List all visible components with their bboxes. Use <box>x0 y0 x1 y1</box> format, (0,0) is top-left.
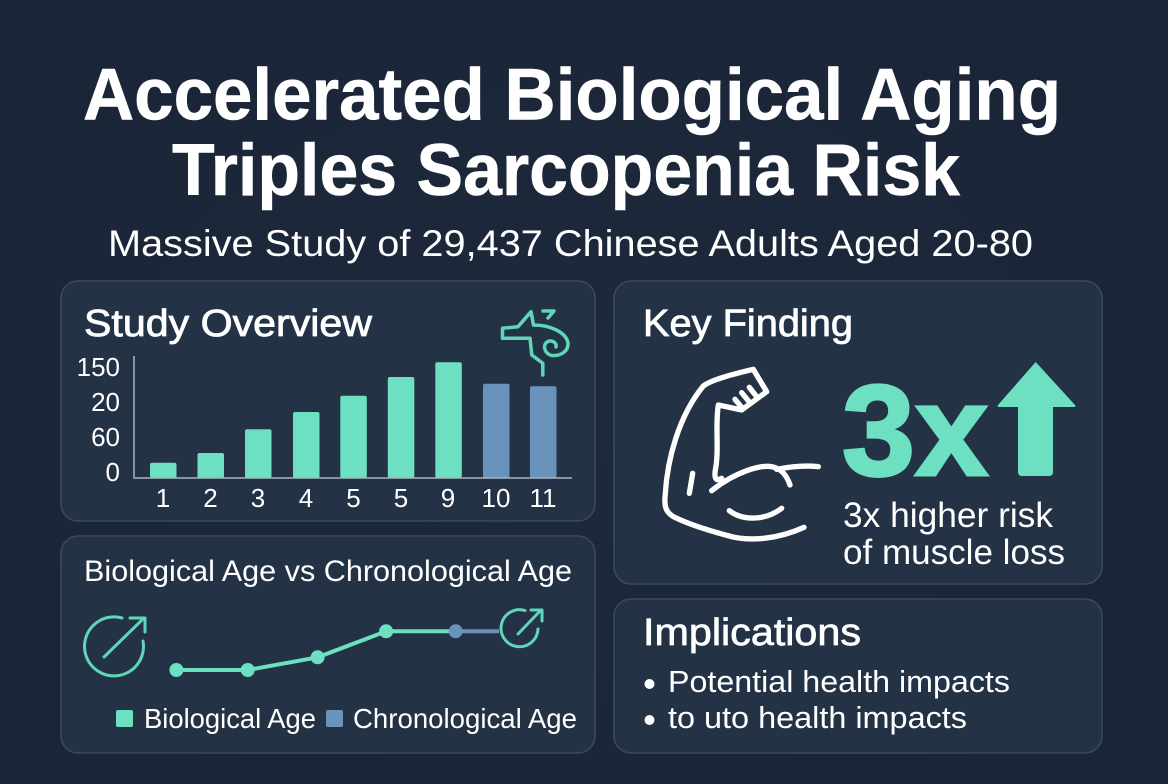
panel: key finding <box>614 281 1102 584</box>
x axis labels <box>156 483 556 513</box>
title: Accelerated Biological Aging <box>83 54 1061 136</box>
panel: implications <box>614 599 1102 753</box>
x axis labels: 5 <box>346 483 361 513</box>
icon: flexed arm <box>665 369 818 539</box>
heading: study overview: Study Overview <box>84 303 373 345</box>
y axis labels: 60 <box>91 422 120 452</box>
key finding text: 3x higher risk <box>843 496 1054 535</box>
y axis labels: 150 <box>77 352 120 382</box>
x axis labels: 2 <box>203 483 218 513</box>
bullet list: Potential health impacts <box>668 664 1010 699</box>
x axis labels: 9 <box>441 483 455 513</box>
big number: 3x: 3x <box>842 359 988 503</box>
legend: Chronological Age <box>353 703 577 734</box>
x axis labels: 5 <box>394 483 408 513</box>
x axis labels: 3 <box>251 483 265 513</box>
heading: biological age vs chronological age: Biological Age vs Chronological Age <box>84 555 572 588</box>
heading: key finding: Key Finding <box>643 303 853 345</box>
x axis labels: 11 <box>530 483 556 513</box>
key finding text <box>843 496 1065 572</box>
icon: large circular arrow <box>84 617 145 676</box>
icon: small circular arrow <box>501 610 542 647</box>
icon: up arrow <box>998 362 1075 476</box>
legend: Biological Age <box>144 703 316 734</box>
subtitle: Massive Study of 29,437 Chinese Adults Aged 20-80 <box>108 223 1033 264</box>
bullet list <box>644 664 1010 735</box>
icon: teal squiggle <box>502 311 568 375</box>
line chart <box>169 624 499 677</box>
panel: biological vs chronological age <box>61 536 595 753</box>
x axis labels: 1 <box>156 483 170 513</box>
key finding text: of muscle loss <box>843 533 1065 572</box>
x axis labels: 4 <box>299 483 313 513</box>
y axis labels <box>77 352 120 487</box>
legend <box>116 703 577 734</box>
bullet list: to uto health impacts <box>668 700 967 735</box>
x axis labels: 10 <box>482 483 510 513</box>
y axis labels: 20 <box>91 387 120 417</box>
y axis labels: 0 <box>106 457 120 487</box>
panel: study overview <box>61 281 595 521</box>
heading: implications: Implications <box>643 612 861 654</box>
title <box>83 54 1061 211</box>
title: Triples Sarcopenia Risk <box>172 130 960 211</box>
bar chart <box>134 356 572 478</box>
